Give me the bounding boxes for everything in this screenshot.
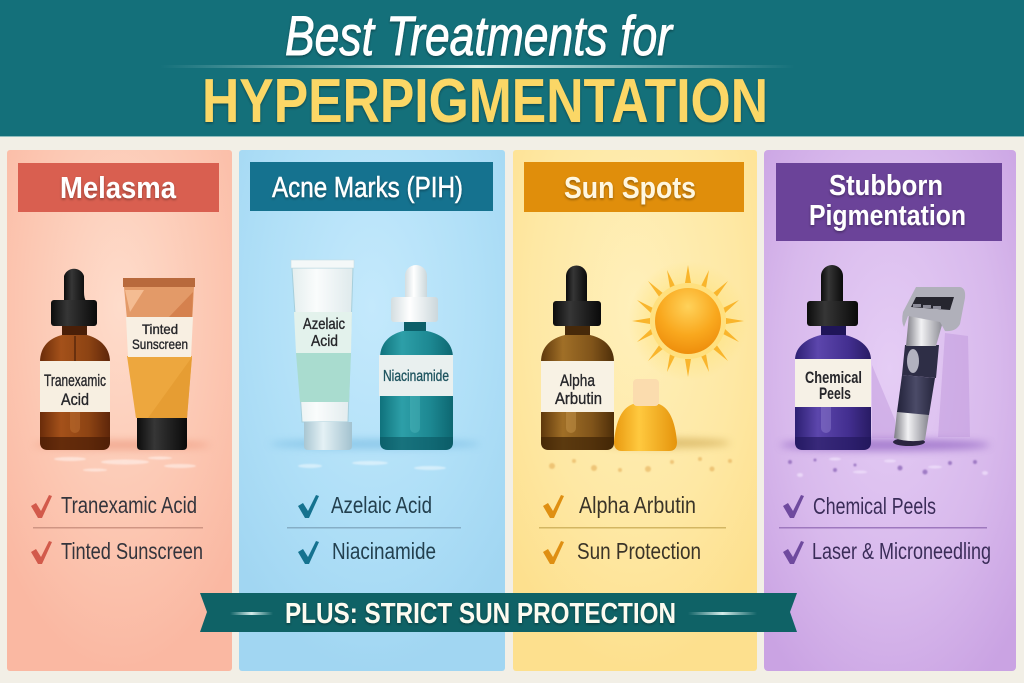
- list: melasma: Tinted Sunscreen: [61, 538, 203, 564]
- title line 1: Best Treatments for: [285, 4, 674, 67]
- speckles: [54, 456, 196, 472]
- heading: sun spots: [524, 162, 744, 212]
- list: sun spots: [539, 492, 726, 564]
- heading: stubborn pigmentation: Stubborn: [829, 170, 943, 202]
- ground shadow: [270, 439, 480, 449]
- title rule: [160, 65, 795, 68]
- ribbon: plus strict sun protection: [200, 593, 797, 632]
- panel: acne marks: [239, 150, 505, 671]
- list: acne marks: [287, 492, 461, 564]
- heading: acne marks: Acne Marks (PIH): [272, 172, 463, 204]
- tube: azelaic acid: Acid: [311, 333, 338, 350]
- heading: sun spots: Sun Spots: [564, 170, 696, 205]
- heading: stubborn pigmentation: Pigmentation: [809, 200, 966, 232]
- icon: small gold cap: [614, 379, 677, 451]
- heading: acne marks: [250, 162, 493, 211]
- list: melasma: [31, 492, 203, 564]
- ground shadow: [780, 439, 990, 451]
- bottle: alpha arbutin: Alpha: [560, 372, 596, 390]
- list: acne marks: Niacinamide: [332, 538, 436, 564]
- title line 2: HYPERPIGMENTATION: [202, 67, 768, 136]
- tube: azelaic acid: Azelaic: [303, 316, 345, 333]
- list: acne marks: Azelaic Acid: [331, 492, 432, 518]
- ground shadow: [34, 440, 210, 450]
- list: stubborn pigmentation: Chemical Peels: [813, 493, 936, 519]
- header banner: [0, 0, 1024, 137]
- bottle: chemical peels: Peels: [819, 384, 851, 403]
- heading: stubborn pigmentation: [776, 163, 1002, 241]
- list: stubborn pigmentation: [779, 493, 991, 564]
- bottle: tranexamic acid: Tranexamic: [44, 371, 106, 390]
- speckles: [298, 461, 446, 470]
- ribbon: plus strict sun protection: PLUS: STRICT SUN PROTECTION: [285, 598, 676, 630]
- tube: tinted sunscreen: Tinted: [142, 321, 178, 337]
- device shadow: [938, 333, 970, 437]
- panel: sun spots: [513, 150, 757, 671]
- bottle: tranexamic acid: [40, 269, 110, 450]
- bottle: niacinamide: [379, 265, 453, 450]
- bottle: tranexamic acid: Acid: [61, 390, 89, 409]
- tube: tinted sunscreen: [123, 278, 195, 450]
- bottle: chemical peels: [795, 265, 895, 450]
- bottle: alpha arbutin: Arbutin: [555, 390, 602, 408]
- speckles: [788, 458, 988, 477]
- tube: tinted sunscreen: Sunscreen: [132, 336, 188, 352]
- speckles: [549, 457, 732, 472]
- heading: melasma: [18, 163, 219, 212]
- list: sun spots: Sun Protection: [577, 538, 701, 564]
- icon: sun: [628, 261, 748, 381]
- icon: laser device: [893, 287, 965, 446]
- bottle: alpha arbutin: [541, 266, 614, 450]
- panel: stubborn pigmentation: [764, 150, 1016, 671]
- tube: azelaic acid: [291, 260, 354, 450]
- bottle: niacinamide: Niacinamide: [383, 368, 449, 385]
- heading: melasma: Melasma: [60, 170, 177, 205]
- list: melasma: Tranexamic Acid: [61, 492, 197, 518]
- ground shadow: [600, 438, 730, 448]
- list: sun spots: Alpha Arbutin: [579, 492, 696, 518]
- bottle: chemical peels: Chemical: [805, 368, 862, 387]
- panel: melasma: [7, 150, 232, 671]
